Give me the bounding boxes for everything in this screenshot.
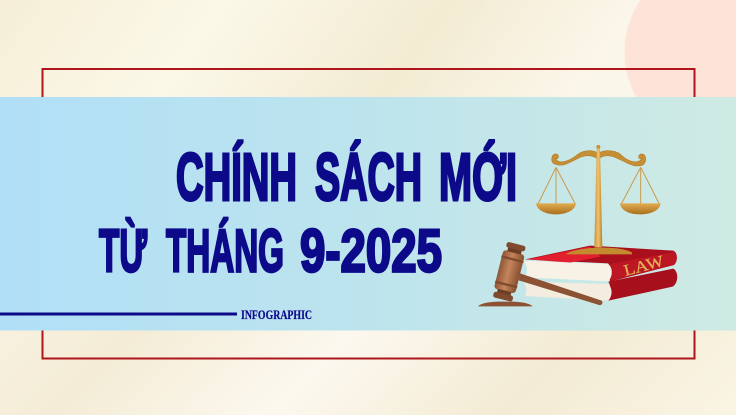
title line 2: [99, 218, 442, 285]
title line 2: 9-2025: [300, 218, 442, 285]
icon: scales, law books and gavel: [478, 145, 677, 306]
title line 2: TỪ: [99, 218, 147, 285]
title line 1: SÁCH: [315, 140, 422, 215]
blue band: [0, 97, 736, 330]
law label: LAW: [622, 253, 667, 280]
infographic label: INFOGRAPHIC: [241, 308, 312, 322]
title line 1: MỚI: [439, 140, 517, 215]
icon: scales: [536, 145, 661, 254]
red frame: [42, 69, 694, 358]
title line 2: THÁNG: [166, 218, 284, 285]
underline rule: [0, 312, 237, 316]
title: [99, 140, 517, 285]
title line 1: [176, 140, 517, 215]
icon: law books: [523, 246, 677, 301]
icon: gavel: [478, 241, 602, 306]
decorative circle: [624, 0, 736, 144]
title line 1: CHÍNH: [176, 140, 297, 215]
